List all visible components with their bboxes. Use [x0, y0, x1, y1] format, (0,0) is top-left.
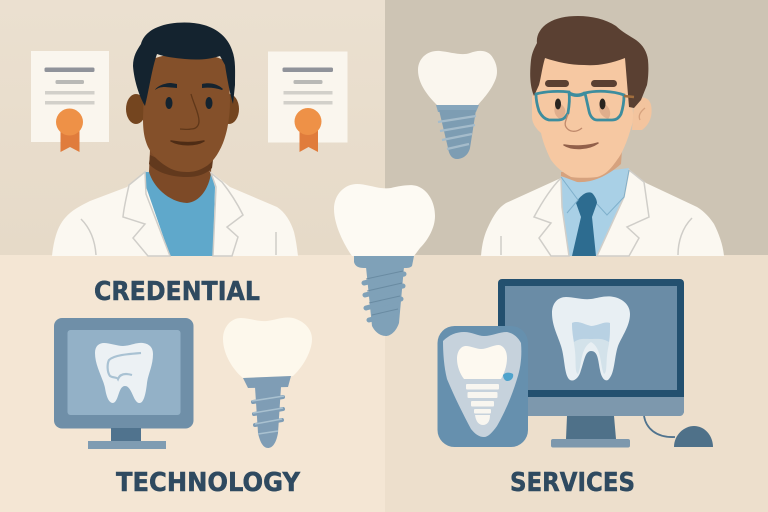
icon: monitor left [54, 318, 194, 449]
icon: implant lower left [223, 317, 312, 448]
nose and mouth [565, 114, 582, 131]
heading: credential: CREDENTIAL [94, 277, 260, 307]
panel: bottom left background [0, 255, 385, 512]
right ear [632, 97, 652, 130]
eyes [555, 98, 561, 110]
collar flaps [561, 170, 629, 215]
ears [126, 94, 146, 124]
hair [133, 23, 235, 106]
neck [149, 150, 212, 203]
shirt collar [561, 168, 629, 256]
glass tint [554, 104, 565, 119]
panel: top left background [0, 0, 385, 255]
lab coat [481, 170, 724, 256]
face [532, 58, 633, 178]
lab coat [52, 172, 298, 256]
icon: implant top right [418, 51, 497, 159]
hair [530, 16, 648, 108]
icon: mouse and cable [644, 416, 713, 447]
blue shirt [144, 172, 215, 256]
icon: tablet with implant [438, 326, 528, 447]
panel: top right background [385, 0, 768, 255]
icon: certificate right [268, 52, 348, 152]
icon: central implant [334, 184, 435, 336]
glasses [536, 91, 624, 120]
heading: services: SERVICES [510, 468, 635, 498]
figure: doctor left [52, 23, 298, 256]
chin shadow [149, 155, 213, 177]
lapels [123, 172, 170, 256]
lapels [534, 178, 569, 256]
face [143, 53, 230, 172]
eyebrows [545, 80, 569, 87]
figure: doctor right [481, 16, 724, 256]
tooth [95, 343, 153, 403]
icon: desktop monitor right [498, 279, 684, 448]
heading: technology: TECHNOLOGY [116, 468, 301, 498]
neck shadow [561, 150, 622, 182]
tooth on screen [552, 296, 630, 381]
tie [572, 192, 597, 256]
eyebrows, eyes, nose, mouth [155, 83, 177, 90]
panel: bottom right background [385, 255, 768, 512]
icon: certificate left [31, 51, 109, 152]
